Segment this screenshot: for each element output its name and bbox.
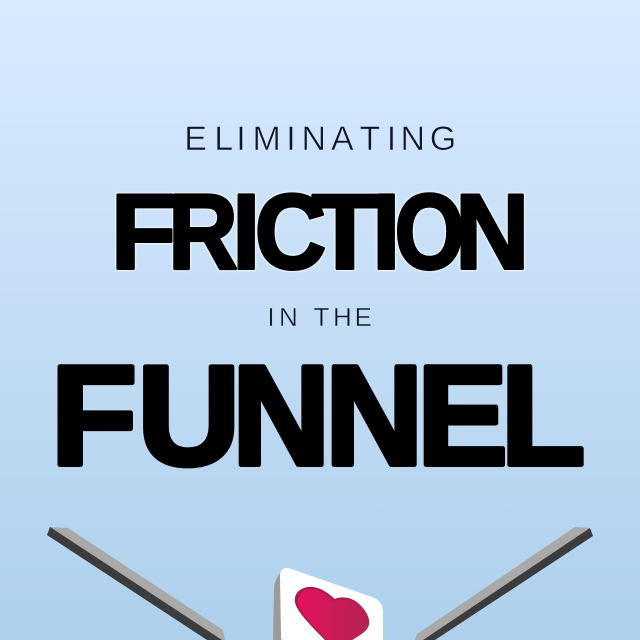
- funnel wall: left: [47, 527, 225, 640]
- heading: friction: C: [255, 172, 326, 291]
- heading: funnel: F: [50, 336, 137, 496]
- heading: friction: I: [232, 173, 260, 292]
- icon: heart card: [273, 568, 383, 640]
- heading: funnel: L: [500, 336, 586, 495]
- heading: funnel: [50, 336, 586, 496]
- funnel wall: right: [415, 527, 593, 640]
- heading: friction: [111, 171, 529, 292]
- heading: friction: T: [312, 171, 378, 291]
- heading: funnel: E: [417, 337, 508, 495]
- heading: funnel: N: [325, 337, 423, 495]
- heading: in the: IN THE: [267, 302, 372, 332]
- heading: funnel: U: [137, 337, 241, 495]
- icon: heart: [295, 587, 369, 640]
- heading: friction: O: [395, 172, 465, 291]
- heading: funnel: N: [232, 337, 330, 495]
- heading: friction: R: [168, 172, 238, 292]
- heading: friction: F: [111, 172, 176, 292]
- heading: friction: I: [372, 173, 400, 292]
- heading: friction: N: [455, 173, 529, 292]
- heading: eliminating: ELIMINATING: [184, 120, 456, 158]
